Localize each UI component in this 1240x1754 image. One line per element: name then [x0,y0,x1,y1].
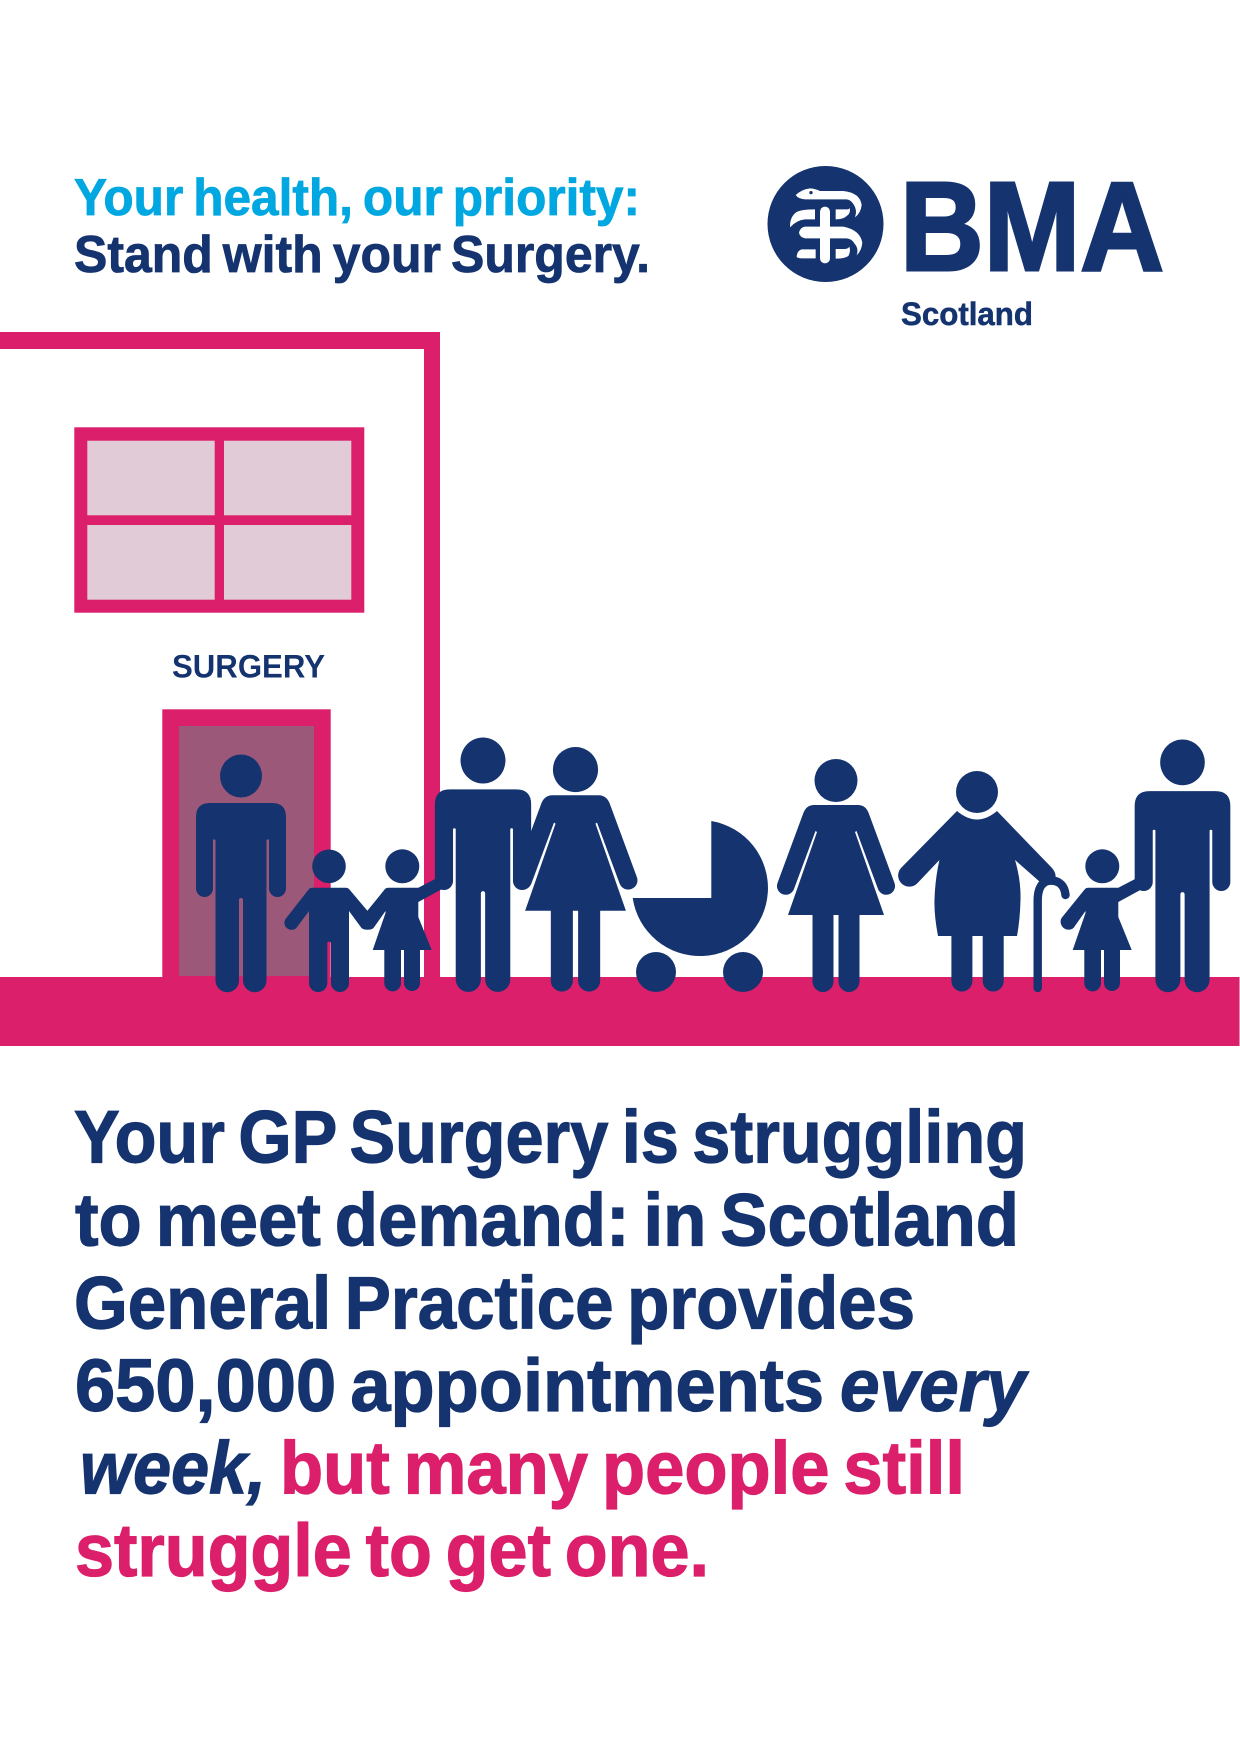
main message: 650,000 appointments [75,1344,824,1427]
window [74,427,364,613]
sign: surgery: SURGERY [172,648,325,684]
heading: campaign title: Your health, our priority: [74,169,640,227]
door [162,709,331,977]
person: elderly woman with cane [898,771,1066,992]
person: girl [361,849,444,991]
heading: campaign title [74,169,650,284]
queue of people [196,738,1230,992]
main message: struggle to get one. [75,1509,709,1592]
icon: pram [633,821,768,992]
main message: but many people still [280,1426,965,1510]
logo: BMA Scotland [768,156,1164,332]
main message: Your GP Surgery is struggling [74,1096,1027,1179]
person: boy [284,850,374,992]
main message: General Practice provides [74,1261,915,1344]
person: tall man [1135,740,1230,992]
main message: week, [80,1426,266,1510]
building: surgery outline [0,332,440,980]
ground [0,977,1240,1046]
icon: BMA rod and serpent roundel [768,166,884,282]
main message [74,1096,1030,1592]
heading: campaign title: Stand with your Surgery. [74,226,650,284]
person: woman [514,747,637,992]
person: tall man [435,738,531,992]
main message: to meet demand: in Scotland [75,1178,1019,1262]
logo: BMA Scotland: Scotland [901,296,1033,332]
person: man in doorway [196,754,286,992]
logo: BMA Scotland: BMA [900,156,1164,297]
person: girl [1061,849,1144,991]
person: woman [777,759,895,992]
main message: every [840,1344,1030,1427]
